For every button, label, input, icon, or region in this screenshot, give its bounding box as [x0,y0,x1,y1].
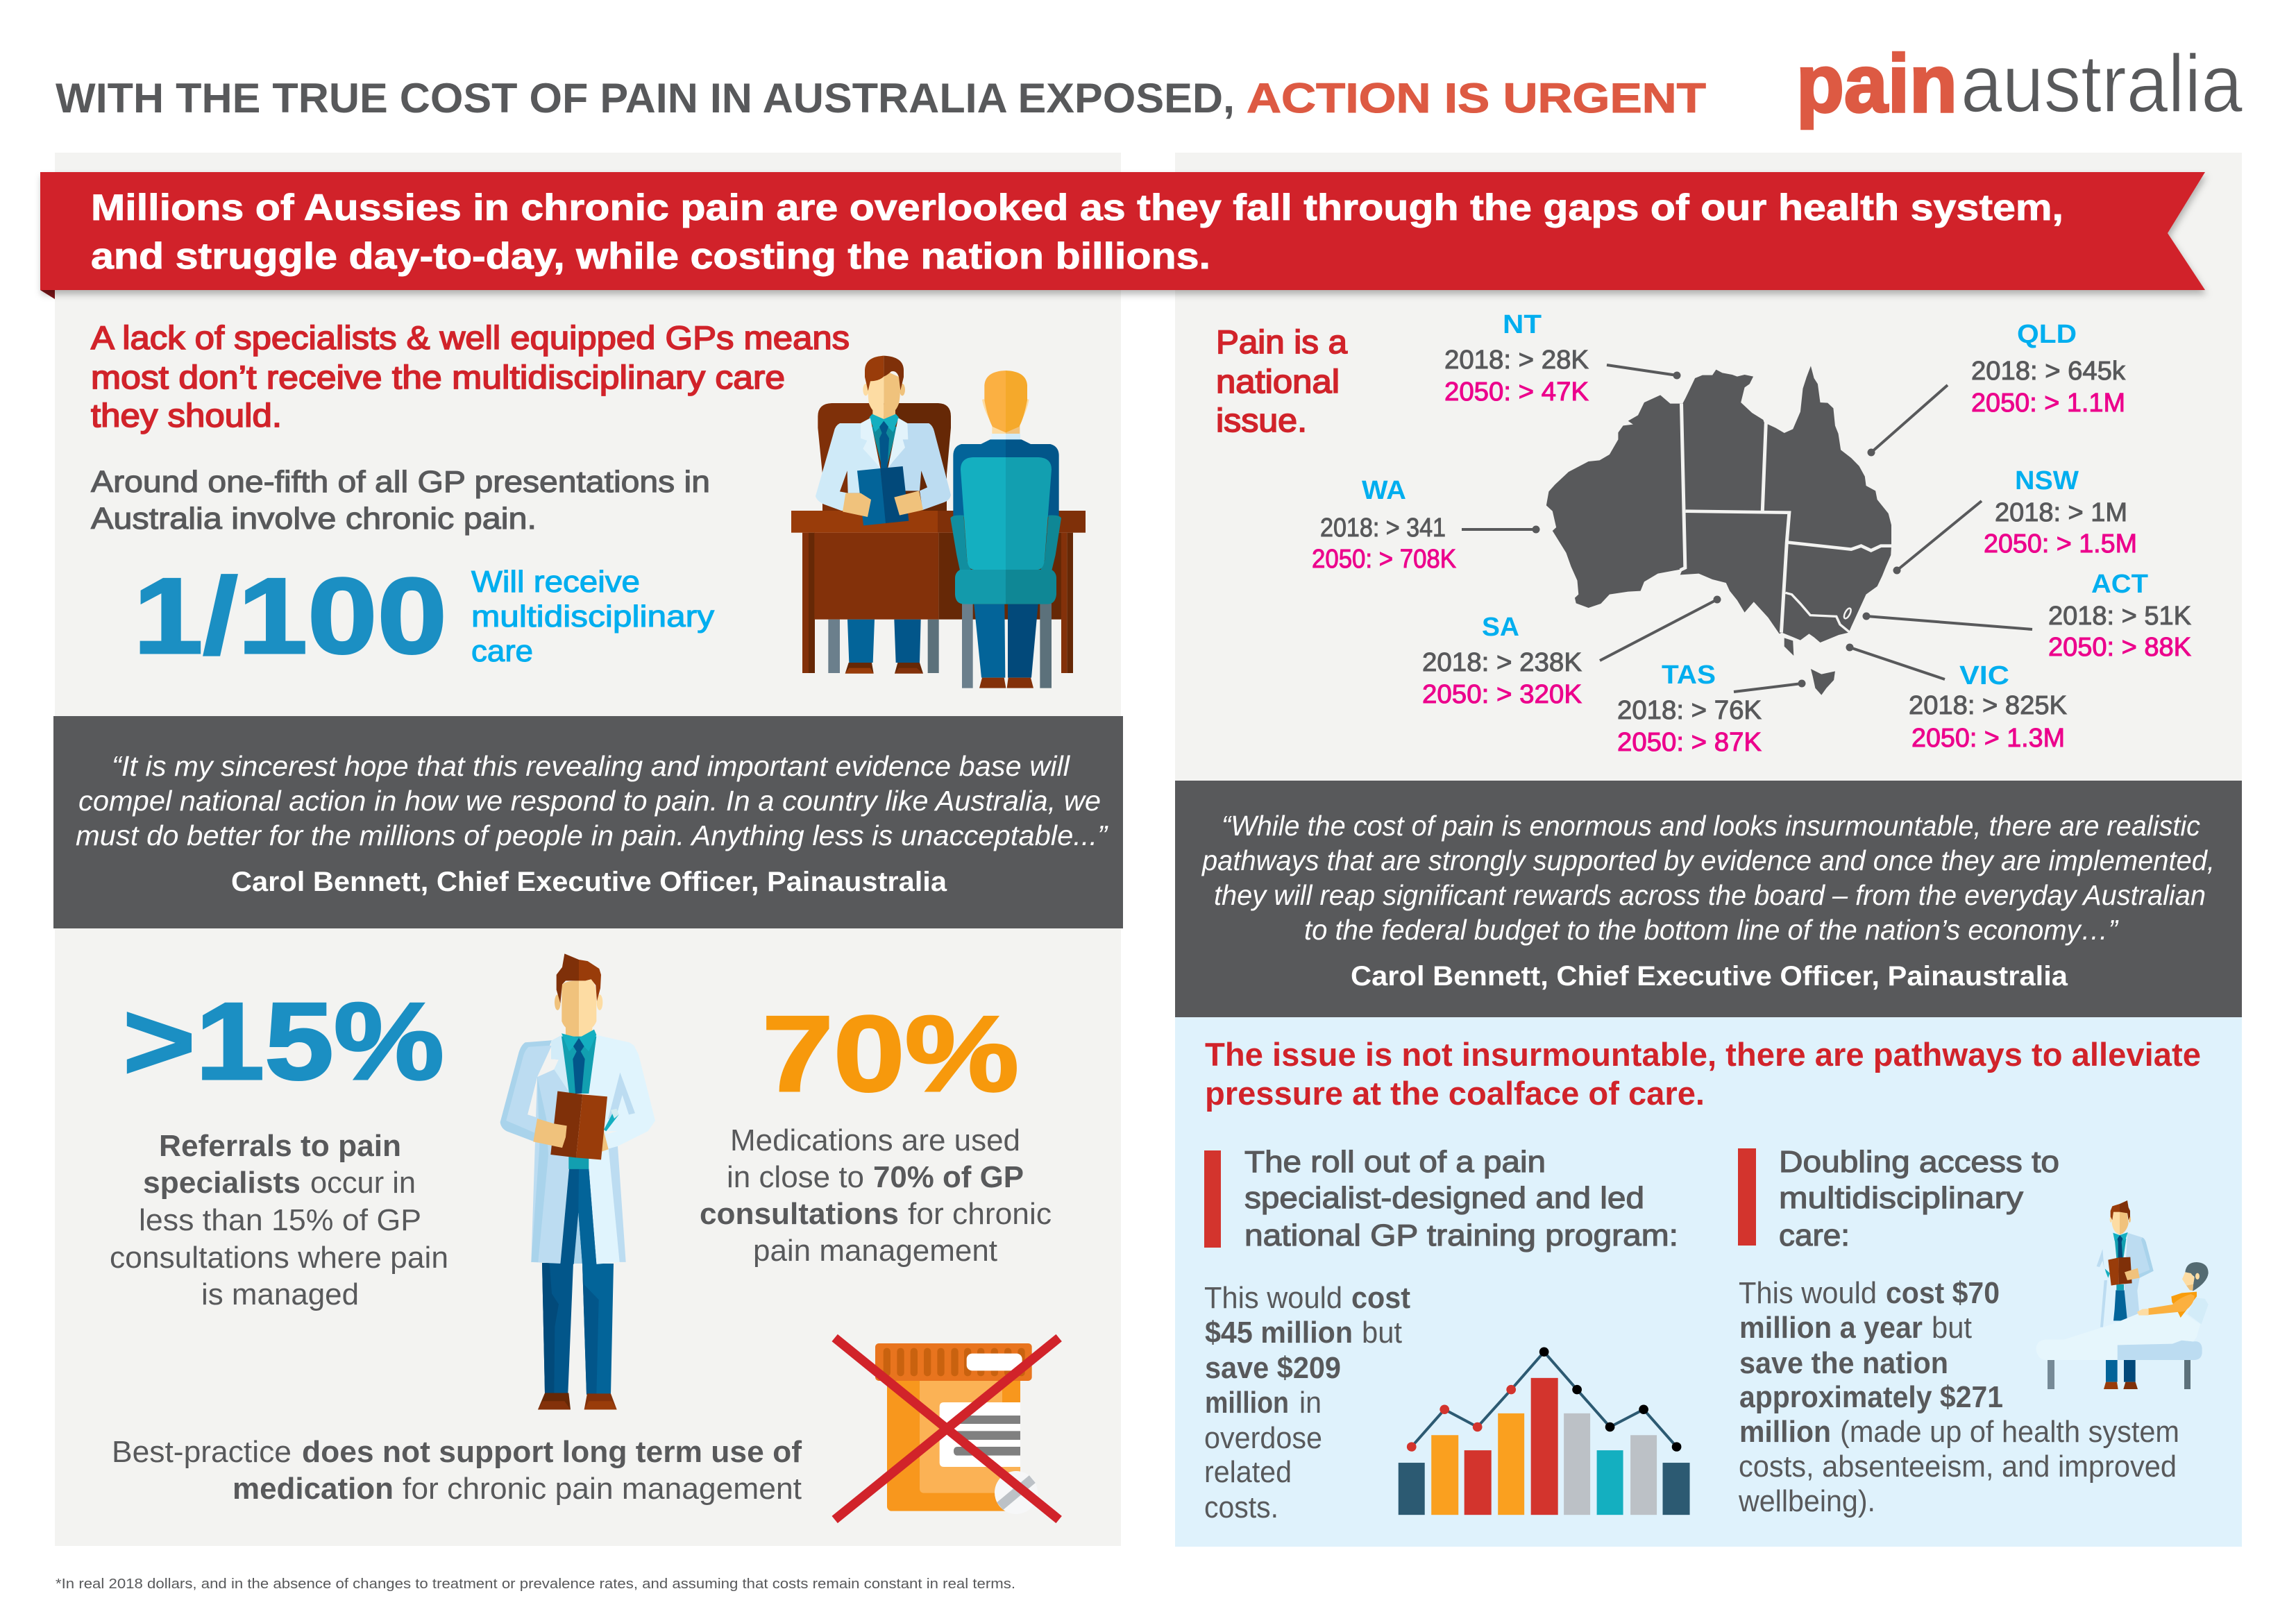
column: GP training program: The roll out of a pain [1244,1145,1546,1179]
logo: painaustralia: australia [1961,38,2243,130]
column: GP training program: specialist-designed and led [1244,1181,1644,1215]
panel: pathways background [1175,1017,2242,1547]
heading: pain is a national issue: Pain is a [1216,323,1348,360]
label: NSW: NSW [2015,466,2079,495]
panel: left quote [53,716,1123,928]
label: QLD [1971,320,2126,418]
text: cost $70 million a year: save the nation [1739,1346,1948,1380]
text: best practice: medication [233,1472,394,1506]
text: cost $70 million a year: million a year [1739,1311,1923,1345]
panel: left quote: must do better for the millions of people in pain. Anything less is unacceptable...” [76,819,1108,851]
panel: right quote: pathways that are strongly supported by evidence and once they are implemented, [1201,844,2215,876]
label: NT [1444,310,1589,407]
label: TAS: 2050: > 87K [1617,728,1762,757]
column: doubling access [1738,1145,2059,1252]
label: SA: SA [1482,613,1519,642]
text: medications used [700,1123,1052,1268]
label: NT: 2050: > 47K [1444,377,1589,407]
panel: left quote: Carol Bennett, Chief Executive Officer, Painaustralia [231,867,947,897]
text: cost $70 million a year: wellbeing). [1738,1484,1875,1518]
stat: greater than 15%: >15% [123,980,444,1103]
text: cost $70 million a year: approximately $271 [1739,1380,2003,1414]
label: WA [1312,476,1456,574]
map of Australia [1546,366,1891,695]
heading: pain is a national issue: issue. [1216,402,1307,439]
text: one-fifth of presentations [91,465,710,536]
panel: left quote: compel national action in how we respond to pain. In a country like Australia, we [78,785,1101,817]
text: medications used: in close to [727,1160,864,1194]
label: SA: 2050: > 320K [1422,680,1582,709]
text: referrals to pain specialists: specialists [143,1166,301,1200]
heading: pain is a national issue: national [1216,363,1340,400]
label: QLD: 2018: > 645k [1971,357,2126,386]
text: best practice: for chronic pain management [403,1472,802,1506]
logo: painaustralia [1796,38,2243,130]
text: cost $45 million: million [1205,1386,1289,1420]
label: VIC: VIC [1959,661,2009,690]
panel: right quote: they will reap significant rewards across the board – from the everyday Australian [1214,879,2206,911]
label: ACT: ACT [2091,570,2148,599]
text: best practice: does not support long term use of [302,1435,802,1469]
text: referrals to pain specialists: Referrals to pain [159,1129,401,1163]
text: best practice [112,1435,802,1506]
label: VIC [1909,661,2067,753]
heading: lack of specialists: A lack of specialists & well equipped GPs means [91,319,850,356]
column: doubling access: Doubling access to [1779,1145,2059,1179]
label: NSW [1984,466,2137,559]
text: best practice: Best-practice [112,1435,292,1469]
text: cost $45 million: in [1299,1386,1322,1420]
heading: lack of specialists: they should. [91,397,282,434]
stat label: will receive multidisciplinary care: care [471,634,533,668]
panel: right quote: to the federal budget to the bottom line of the nation’s economy…” [1304,914,2119,946]
label: WA: 2018: > 341 [1320,513,1446,543]
banner ribbon [40,172,2205,299]
text: cost $70 million a year [1738,1276,2179,1518]
panel: left background [55,153,1121,1546]
text: cost $70 million a year: million [1739,1415,1831,1449]
text: referrals to pain specialists: is managed [201,1277,359,1311]
label: WA: WA [1362,476,1406,505]
text: referrals to pain specialists: consultations where pain [110,1241,448,1275]
stat label: will receive multidisciplinary care: multidisciplinary [471,600,714,634]
text: medications used: 70% of GP [873,1160,1024,1194]
text: medications used: Medications are used [730,1123,1020,1157]
text: cost $70 million a year: (made up of health system [1840,1415,2179,1449]
panel: right background [1175,153,2242,781]
panel: right quote: “While the cost of pain is enormous and looks insurmountable, there are realistic [1222,810,2200,842]
icon: doctor at desk with patient [791,356,1086,688]
text: one-fifth of presentations: Around one-fifth of all GP presentations in [91,465,710,499]
label: NT: 2018: > 28K [1444,346,1589,375]
column: GP training program [1204,1145,1678,1252]
text: referrals to pain specialists: occur in [310,1166,416,1200]
title: WITH THE TRUE COST OF PAIN IN AUSTRALIA EXPOSED, [56,75,1235,121]
heading: issue is not insurmountable: pressure at the coalface of care. [1205,1075,1705,1112]
text: medications used: for chronic [908,1197,1052,1231]
title: ACTION IS URGENT [1247,75,1706,121]
text: medications used: pain management [753,1234,997,1268]
label: TAS [1617,661,1762,757]
column: doubling access: multidisciplinary [1779,1181,2023,1215]
label: VIC: 2018: > 825K [1909,691,2067,720]
label: ACT [2048,570,2191,662]
text: cost $45 million: but [1362,1316,1402,1350]
text: cost $45 million: costs. [1204,1490,1278,1524]
panel: right quote: Carol Bennett, Chief Executive Officer, Painaustralia [1351,961,2068,992]
icon: crossed-out medicine bottle [835,1338,1059,1520]
label: VIC: 2050: > 1.3M [1911,724,2065,753]
stat label: will receive multidisciplinary care [471,565,714,668]
text: cost $45 million: related [1204,1455,1292,1489]
icon: standing doctor [500,953,655,1409]
column: GP training program: national GP training program: [1244,1218,1678,1252]
label: QLD: QLD [2017,320,2077,349]
panel: right quote [1175,781,2242,1017]
panel: left quote: “It is my sincerest hope that this revealing and important evidence base will [112,750,1071,782]
text: cost $70 million a year: cost $70 [1886,1276,2000,1310]
column: doubling access: care: [1779,1218,1850,1252]
label: NSW: 2050: > 1.5M [1984,529,2137,559]
heading: lack of specialists [91,319,850,434]
text: referrals to pain specialists: less than 15% of GP [139,1203,421,1237]
label: TAS: TAS [1662,661,1716,690]
text: cost $45 million: overdose [1204,1421,1322,1455]
footnote: *In real 2018 dollars, and in the absence of changes to treatment or prevalence rates, and assuming that costs remain constant in real terms. [56,1577,1015,1592]
text: referrals to pain specialists [110,1129,448,1311]
banner ribbon: and struggle day-to-day, while costing the nation billions. [91,236,1210,277]
stat: 1/100: 1/100 [133,556,447,676]
banner ribbon: Millions of Aussies in chronic pain are overlooked as they fall through the gaps of our health system, [91,187,2063,228]
logo: painaustralia: pain [1796,38,1957,130]
stat: 70%: 70% [762,994,1019,1114]
text: one-fifth of presentations: Australia involve chronic pain. [91,502,537,536]
heading: issue is not insurmountable: The issue is not insurmountable, there are pathways to alleviate [1205,1036,2201,1073]
text: cost $70 million a year: costs, absenteeism, and improved [1739,1450,2177,1484]
connector lines [1462,365,2032,692]
label: TAS: 2018: > 76K [1617,696,1762,725]
text: cost $45 million: save $209 [1205,1351,1341,1385]
label: ACT: 2050: > 88K [2048,633,2191,662]
text: cost $45 million: $45 million [1205,1316,1353,1350]
chart: bars and trend line [1399,1348,1690,1515]
heading: pain is a national issue [1216,323,1348,439]
heading: lack of specialists: most don’t receive the multidisciplinary care [91,359,785,396]
label: NT: NT [1503,310,1542,339]
stat label: will receive multidisciplinary care: Will receive [471,565,640,599]
text: cost $70 million a year: but [1932,1311,1972,1345]
icon: doctor and patient in bed [2036,1200,2209,1389]
text: medications used: consultations [700,1197,899,1231]
label: NSW: 2018: > 1M [1995,498,2127,527]
text: cost $45 million: cost [1351,1281,1410,1315]
label: QLD: 2050: > 1.1M [1971,389,2125,418]
label: SA [1422,613,1582,709]
text: cost $70 million a year: This would [1739,1276,1877,1310]
heading: issue is not insurmountable [1205,1036,2201,1112]
label: SA: 2018: > 238K [1422,648,1582,677]
text: cost $45 million [1204,1281,1410,1524]
label: ACT: 2018: > 51K [2048,602,2191,631]
label: WA: 2050: > 708K [1312,545,1456,574]
text: cost $45 million: This would [1204,1281,1342,1315]
